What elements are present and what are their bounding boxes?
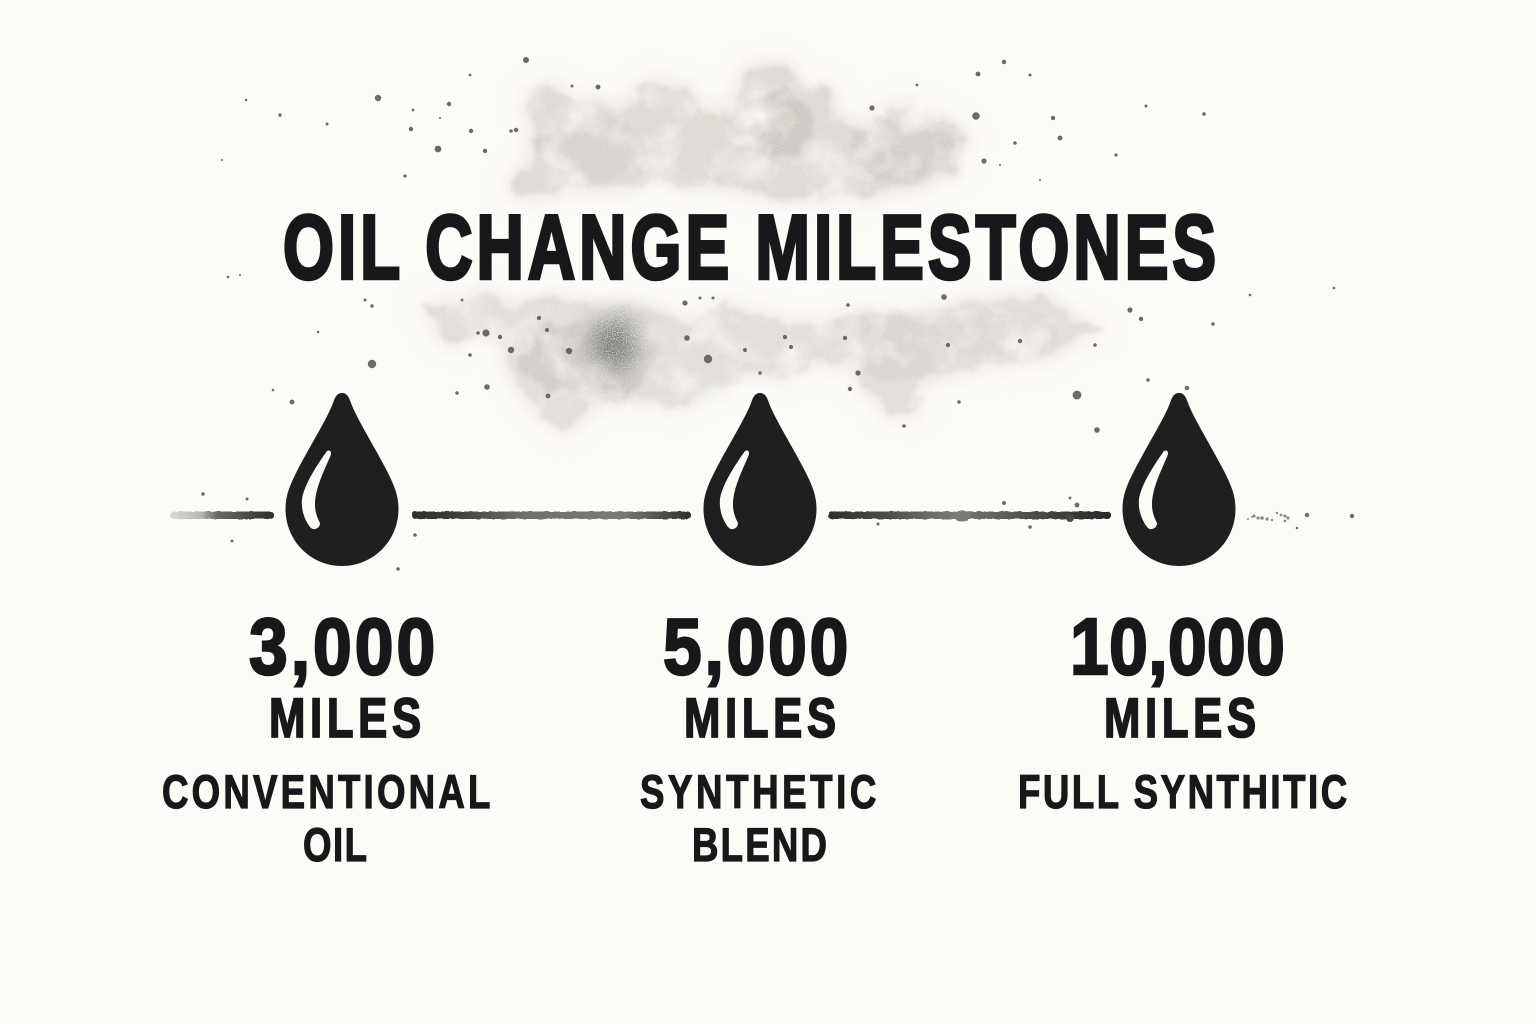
milestone 3: 10,000 miles full synthitic: MILES: [1104, 687, 1256, 749]
milestone 2: 5,000 miles synthetic blend: 5,000: [663, 601, 848, 691]
title: OIL CHANGE MILESTONES: [283, 196, 1216, 298]
milestone 1: 3,000 miles conventional oil: 3,000: [249, 601, 435, 691]
dark ink bloom: [593, 314, 637, 370]
milestone 2: 5,000 miles synthetic blend: MILES: [684, 687, 836, 749]
timeline line: middle segment: [412, 512, 691, 519]
icon: oil drop 2: [704, 393, 816, 566]
icon: oil drop 1: [286, 393, 398, 566]
milestone 3: 10,000 miles full synthitic: FULL SYNTHITIC: [1018, 766, 1347, 818]
timeline line: right segment: [828, 510, 1111, 522]
milestone 2: 5,000 miles synthetic blend: [640, 601, 876, 871]
milestone 1: 3,000 miles conventional oil: [162, 601, 490, 871]
timeline line: left segment: [170, 512, 274, 519]
milestone 3: 10,000 miles full synthitic: [1018, 601, 1347, 818]
watercolor wash below title: [418, 298, 1104, 432]
ink speckles: [201, 57, 1354, 571]
watercolor wash above title: [519, 63, 969, 197]
icon: oil drop 3: [1122, 393, 1236, 566]
milestone 3: 10,000 miles full synthitic: 10,000: [1070, 601, 1285, 691]
milestone 1: 3,000 miles conventional oil: OIL: [303, 819, 367, 871]
milestone 2: 5,000 miles synthetic blend: BLEND: [692, 819, 827, 871]
milestone 1: 3,000 miles conventional oil: CONVENTIONAL: [162, 766, 490, 818]
ink smudge right of timeline: [1247, 512, 1290, 522]
milestone 2: 5,000 miles synthetic blend: SYNTHETIC: [640, 766, 876, 818]
milestone 1: 3,000 miles conventional oil: MILES: [269, 687, 421, 749]
